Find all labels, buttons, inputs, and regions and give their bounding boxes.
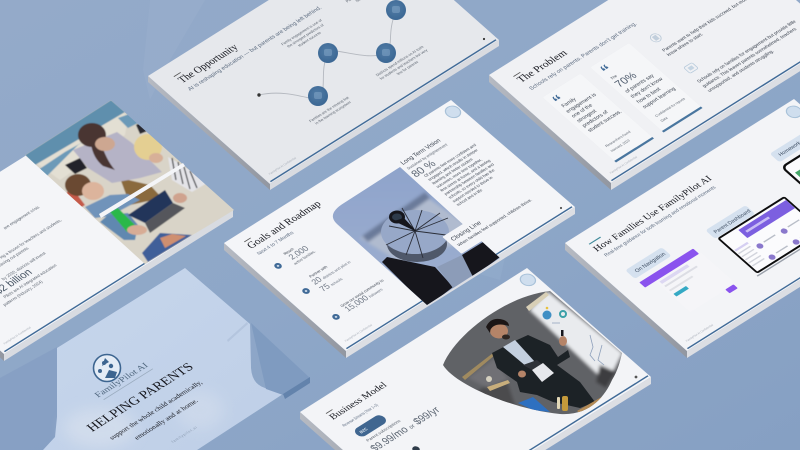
goal 3: 15,000followers <box>342 284 385 313</box>
text block: ing a lesson for teachers and students, <box>0 218 63 259</box>
pill: B2C <box>352 413 389 438</box>
path connecting steps <box>259 11 396 100</box>
vision subheading: Sustained by enlightenment <box>405 142 449 170</box>
text block: are engagement crisis <box>2 205 41 230</box>
photo: presenter at whiteboard <box>443 291 622 414</box>
panel: goals and roadmap slide <box>224 100 575 358</box>
subtitle: Real-time guidance for both learning and emotional moments <box>603 185 718 258</box>
panel: business model slide <box>300 268 651 450</box>
icon: book <box>684 62 698 73</box>
logo <box>442 104 464 120</box>
start dot <box>257 93 261 97</box>
source: Data <box>660 116 669 123</box>
point 2: unsupported, and students struggling. <box>706 49 776 94</box>
tagline line 2: emotionally and at home. <box>133 398 200 441</box>
web address: familypilot.ai <box>171 426 198 444</box>
goal 1: 2,000 <box>286 244 311 261</box>
panel: the problem slide <box>489 0 800 190</box>
phone mockup <box>782 141 800 229</box>
quote text: predictors of <box>581 109 610 129</box>
vision body: support needed to thrive in <box>451 175 494 203</box>
title: The Opportunity <box>176 42 242 85</box>
caption: step 2: Family engagement is one of <box>280 18 324 46</box>
goal 2: 20districts and pilot in <box>309 257 353 286</box>
icon: quote mark: “ <box>548 91 570 109</box>
caption: step 3: few for parents <box>396 60 419 76</box>
vision body: school and in life <box>455 188 484 207</box>
text block: Pilots are AI integrated education <box>2 263 58 299</box>
quote text: strongest <box>576 108 599 124</box>
title: How Families Use FamilyPilot AI <box>592 174 715 254</box>
vision statistic: 80 % <box>409 158 439 180</box>
text block: patterns (Industry, 2024) <box>2 279 44 307</box>
pill: parent dashboard <box>705 205 755 239</box>
quote card 2: 70% <box>612 70 640 90</box>
closing line heading: Closing Line <box>449 220 484 243</box>
laptop mockup <box>716 197 800 277</box>
quote text: engagement is <box>565 92 598 114</box>
icon: FamilyPilot logo <box>94 354 120 382</box>
vision body: partnership between families and <box>443 162 495 196</box>
vision body: engaged, which results in deeper <box>427 147 479 182</box>
goal 1: Reach <box>282 247 295 256</box>
title: Goals and Roadmap <box>245 199 324 251</box>
caption: step 2: the strongest predictors of <box>286 23 326 48</box>
pill: parent dashboard: Parent Dashboard <box>713 209 753 235</box>
text block: by 2030, districts will invest <box>0 250 47 281</box>
panel: cover slide <box>0 268 310 450</box>
icon: quote mark: “ <box>596 61 618 79</box>
point 2: Schools rely on families for engagement but provide little <box>696 19 798 84</box>
long term vision heading: Long Term Vision <box>399 137 443 166</box>
statistic text: of parents say <box>624 73 656 94</box>
page dot <box>560 207 562 209</box>
marker <box>411 445 421 450</box>
vision body: Of parents feel more confident and <box>422 143 477 178</box>
footer: FamilyPilot AI Confidential <box>268 156 298 176</box>
point 1: know where to start. <box>666 32 705 58</box>
caption: step 3: for students and teachers but very <box>379 49 429 81</box>
logo <box>783 104 800 120</box>
icon: hand <box>648 32 663 44</box>
closing line callout <box>442 189 538 254</box>
vision body: schools, so every child has the <box>447 168 496 200</box>
subtitle: Next 4 to 7 Months <box>256 230 296 257</box>
goal 3 <box>326 278 392 322</box>
subtitle: Revenue Streams (Year 1–3) <box>341 402 380 428</box>
point 2: guidance. This leaves parents overwhelmed, teachers <box>701 26 799 89</box>
footer: FamilyPilot AI Confidential <box>2 326 32 345</box>
vision body: learning and better student <box>431 157 475 185</box>
pill: B2C: B2C <box>358 427 369 434</box>
revenue label: Parent subscriptions <box>365 418 402 443</box>
caption: step 1: in the learning ecosystem <box>314 101 352 125</box>
quote card 2 <box>590 43 703 133</box>
statistic text: support learning <box>641 86 677 110</box>
panel: the opportunity slide <box>148 0 499 190</box>
footer: FamilyPilot AI Confidential <box>344 323 374 343</box>
photo: compass <box>332 167 500 305</box>
caption: step 3: Districts spend millions on AI tools <box>375 45 425 77</box>
goal 2 <box>293 254 360 301</box>
brand name: FamilyPilot AI <box>93 361 150 399</box>
panel: how families use FamilyPilot AI slide <box>565 99 800 358</box>
panel: teacher photo slide <box>0 90 250 361</box>
goal 1 <box>268 240 317 274</box>
footer: FamilyPilot AI Confidential <box>609 155 639 175</box>
pill: homework help <box>770 128 800 162</box>
goal 1: active families. <box>292 249 317 266</box>
quote source: Researchers found <box>604 130 632 148</box>
quote source: Harvard, 2023 <box>610 139 631 153</box>
caption: step 2: student success <box>297 31 322 48</box>
icon: step circles <box>308 0 406 106</box>
statistic text: they don’t know <box>630 77 665 100</box>
pill: on navigation <box>625 247 672 279</box>
subtitle: Schools rely on parents. Parents don’t get training. <box>528 21 639 92</box>
pill: on navigation: On Navigation <box>634 252 667 274</box>
quote text: one of the <box>570 103 594 119</box>
subtitle: AI is reshaping education — but parents are being left behind. <box>187 5 324 92</box>
statistic text: how to best <box>636 87 663 105</box>
quote card 1 <box>542 73 654 163</box>
footer: FamilyPilot AI Confidential <box>685 323 715 343</box>
caption: step 1: Families are the missing link <box>308 96 350 123</box>
photo: teacher and children <box>25 100 234 264</box>
white divider on photo <box>99 163 185 218</box>
closing line text: When families feel supported, children thrive. <box>456 197 533 247</box>
source: Confidential for reports <box>654 97 686 118</box>
navigation mockup <box>639 247 740 322</box>
goal 3: Grow our social community to <box>339 278 385 308</box>
goal 2: Partner with <box>308 264 329 279</box>
heading: HELPING PARENTS <box>84 360 197 434</box>
goal 2: 75schools <box>317 274 344 293</box>
title: The Problem <box>515 48 570 85</box>
page dot <box>635 376 637 378</box>
quote text: student success. <box>587 109 624 134</box>
statistic: The <box>609 74 618 81</box>
quote text: Family <box>560 97 578 109</box>
title: Business Model <box>327 381 390 422</box>
logo <box>517 272 539 288</box>
tagline line 1: support the whole child academically, <box>108 379 204 441</box>
page dot <box>483 38 485 40</box>
vision body: less stress at home, and a lasting <box>439 158 492 192</box>
vision body: outcomes, more time together, <box>435 157 483 189</box>
